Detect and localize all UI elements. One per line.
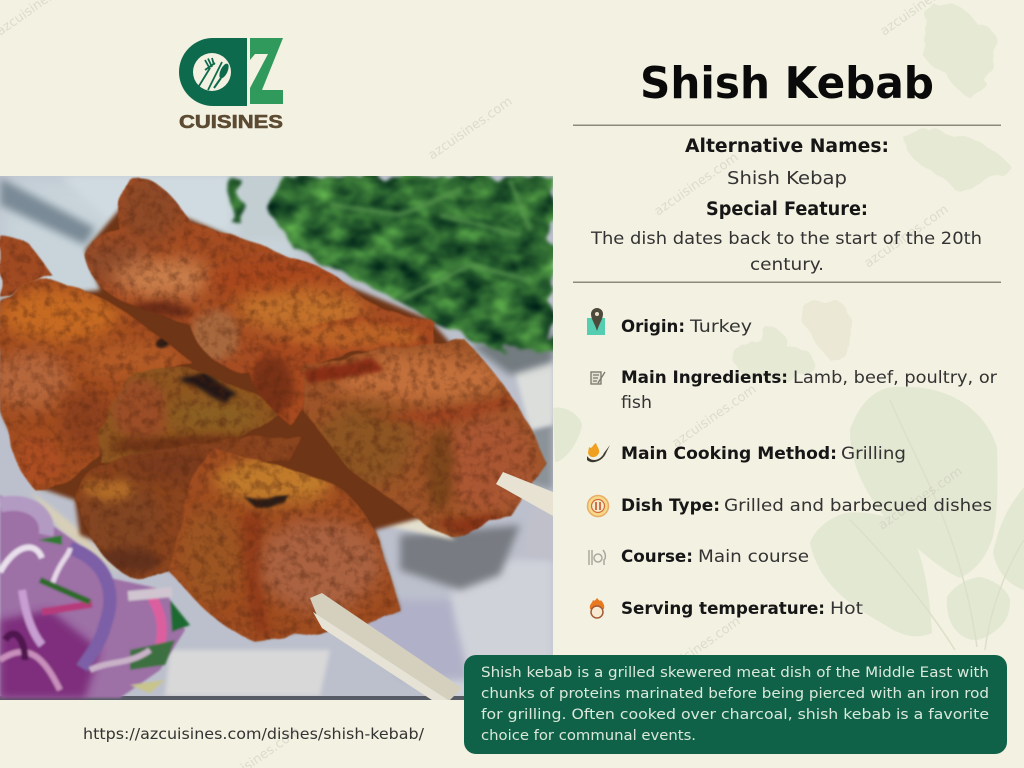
leaf veins (850, 400, 1024, 650)
kebab chunk: middle shoulder (248, 317, 436, 426)
fact: serving temperature: Serving temperature: (621, 599, 825, 619)
kebab chunk: front (168, 448, 402, 642)
title: Shish Kebab (640, 58, 934, 109)
fact: main ingredients: Main Ingredients: (621, 368, 788, 388)
icon: plate and utensils (589, 550, 605, 565)
special feature text: century. (750, 255, 824, 275)
watermarks: azcuisines.com (862, 202, 951, 271)
photo: shish kebab (0, 160, 560, 700)
onion salad (0, 495, 190, 698)
divider top (573, 124, 1001, 126)
logo wordmark: CUISINES (179, 111, 283, 132)
fact: main ingredients: Lamb, beef, poultry, or (793, 368, 998, 388)
shadow mass under meat (0, 206, 452, 643)
description text: choice for communal events. (481, 728, 696, 744)
fact: origin: Turkey (689, 317, 752, 337)
fact: main cooking method (587, 443, 906, 464)
special feature text (590, 229, 982, 275)
kebab chunk: back left (0, 235, 52, 297)
fact: dish type (588, 496, 992, 516)
icon: plate with cutlery (588, 496, 608, 516)
icon: hot flame (590, 598, 604, 618)
fact: course (589, 547, 809, 567)
herb sprig middle (735, 300, 851, 380)
special feature heading: Special Feature: (706, 199, 868, 220)
fact: main cooking method: Grilling (841, 444, 906, 464)
icon: map pin (587, 308, 605, 335)
fact: origin: Origin: (621, 317, 685, 337)
fact: serving temperature: Hot (830, 599, 863, 619)
special feature text: The dish dates back to the start of the 20th (590, 229, 982, 249)
watermarks: azcuisines.com (652, 150, 741, 219)
background leaves (553, 3, 1024, 650)
alternative names heading: Alternative Names: (685, 136, 889, 157)
large spinach leaves (553, 387, 1024, 640)
fact: dish type: Grilled and barbecued dishes (724, 496, 992, 516)
fact: main cooking method: Main Cooking Method: (621, 444, 837, 464)
watermarks: azcuisines.com (878, 664, 967, 733)
logo mark: z (250, 38, 283, 104)
fact: origin (587, 308, 752, 337)
kebab chunk: back (84, 176, 435, 374)
icon: notepad (591, 372, 605, 384)
kebab chunk: lower (74, 435, 301, 580)
url: https://azcuisines.com/dishes/shish-kebab/ (83, 725, 425, 743)
watermarks: azcuisines.com (654, 614, 743, 683)
skewer: right (496, 472, 553, 516)
plate background (0, 176, 553, 700)
watermarks: azcuisines.com (876, 464, 965, 533)
description text (481, 665, 989, 744)
callout: description (464, 655, 1007, 754)
fact: dish type: Dish Type: (621, 496, 720, 516)
kebab chunk: centre (98, 366, 278, 464)
description text: Shish kebab is a grilled skewered meat dish of the Middle East with (481, 665, 989, 681)
fact: main ingredients (591, 368, 998, 413)
special feature (590, 199, 982, 275)
logo (179, 38, 283, 132)
logo mark: a (179, 38, 247, 106)
divider bottom (573, 282, 1001, 283)
description text: for grilling. Often cooked over charcoal, shish kebab is a favorite (481, 707, 989, 723)
herb sprig top right (902, 3, 1010, 190)
alternative names (685, 136, 889, 189)
herbs (230, 176, 553, 352)
skewer: front (310, 593, 462, 700)
watermarks: azcuisines.com (426, 94, 515, 163)
kebab chunk: left (0, 277, 192, 492)
description text: chunks of proteins marinated before being pierced with an iron rod (481, 686, 989, 702)
alternative names value: Shish Kebap (727, 168, 847, 189)
fact: course: Course: (621, 547, 693, 567)
fact: course: Main course (698, 547, 809, 567)
icon: pan with flame (587, 443, 610, 462)
fact: main ingredients: fish (621, 393, 652, 413)
kebab chunk: right front (303, 338, 548, 538)
watermarks: azcuisines.com (670, 382, 759, 451)
